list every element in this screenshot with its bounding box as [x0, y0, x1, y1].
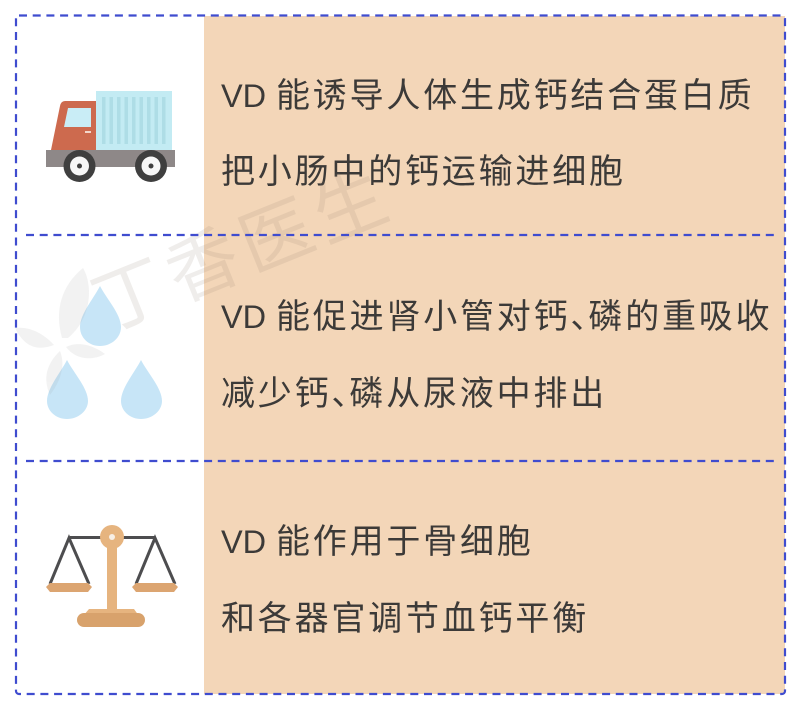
- watermark: brand text: 丁香医生: [82, 154, 405, 347]
- row 3 text: 和各器官调节血钙平衡: [221, 600, 589, 638]
- panel: text background: [204, 16, 785, 694]
- icon: balance scale: [46, 525, 178, 627]
- row 1 text: [221, 77, 754, 191]
- row 3 text: [221, 523, 589, 638]
- row 2 text: [221, 298, 772, 413]
- row 1 text: VD: [221, 78, 266, 114]
- row 2 text: 、磷的重吸收: [570, 298, 772, 336]
- row 2 text: 减少钙、磷从尿液中排出: [221, 375, 607, 413]
- row 2 text: VD: [221, 299, 266, 335]
- icon: truck: [46, 91, 175, 182]
- divider: row 2 and 3: [26, 460, 775, 462]
- row 1 text: 能诱导人体生成钙结合蛋白质: [276, 77, 754, 115]
- icon: water drops: [47, 286, 162, 419]
- row 1 text: 把小肠中的钙运输进细胞: [221, 153, 626, 191]
- row 2 text: 能促进肾小管对钙: [276, 298, 570, 336]
- watermark: logo leaves: [15, 268, 105, 395]
- row 3 text: 能作用于骨细胞: [276, 523, 534, 561]
- row 3 text: VD: [221, 524, 266, 560]
- divider: row 1 and 2: [26, 234, 775, 236]
